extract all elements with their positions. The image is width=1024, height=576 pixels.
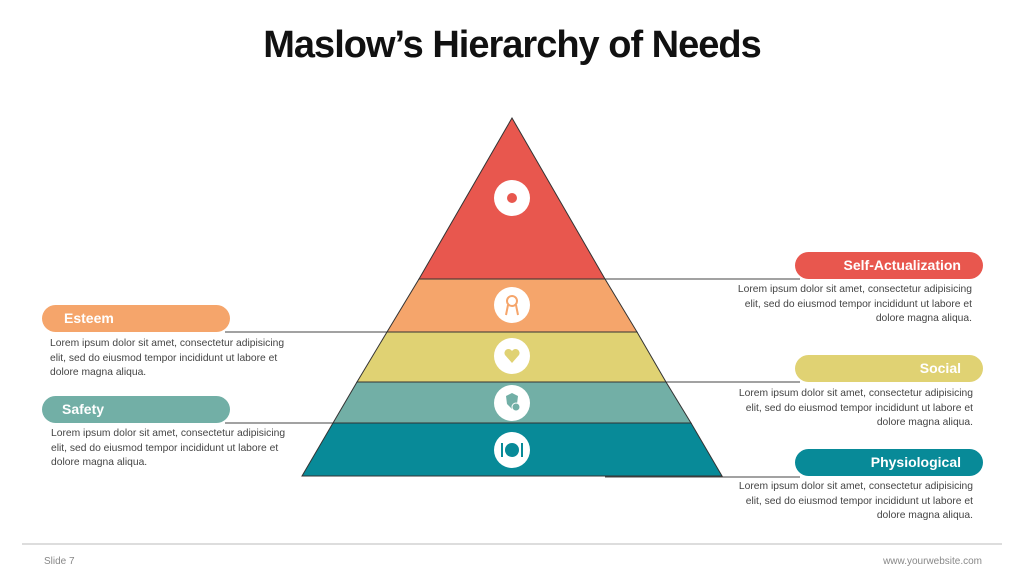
text: esteem: Lorem ipsum dolor sit amet, consectetur adipisicing elit, sed do eiusmod tempor incididunt ut labore et dolore magna aliqua. [50,338,284,378]
text: self-actualization: Lorem ipsum dolor sit amet, consectetur adipisicing elit, sed do eiusmod tempor incididunt ut labore et dolore magna aliqua. [738,284,972,324]
footer: slide number: Slide 7 [44,556,75,567]
icon: shield [494,385,530,421]
label: self-actualization [795,252,983,279]
label: safety: Safety [62,401,104,417]
label: self-actualization: Self-Actualization [844,257,961,273]
footer: website: www.yourwebsite.com [883,556,982,567]
label: esteem: Esteem [64,310,114,326]
icon: award [494,287,530,323]
title: Maslow’s Hierarchy of Needs [263,24,761,66]
text: safety: Lorem ipsum dolor sit amet, consectetur adipisicing elit, sed do eiusmod tempor incididunt ut labore et dolore magna aliqua. [51,428,285,468]
label: physiological: Physiological [871,454,961,470]
footer divider [22,543,1002,545]
label: physiological [795,449,983,476]
label: esteem [42,305,230,332]
label: social: Social [920,360,961,376]
label: social [795,355,983,382]
icon: plate [494,432,530,468]
icon: heart [494,338,530,374]
text: social: Lorem ipsum dolor sit amet, consectetur adipisicing elit, sed do eiusmod tempor incididunt ut labore et dolore magna aliqua. [739,388,973,428]
label: safety [42,396,230,423]
icon: smiley [494,180,530,216]
text: physiological: Lorem ipsum dolor sit amet, consectetur adipisicing elit, sed do eiusmod tempor incididunt ut labore et dolore magna aliqua. [739,481,973,521]
